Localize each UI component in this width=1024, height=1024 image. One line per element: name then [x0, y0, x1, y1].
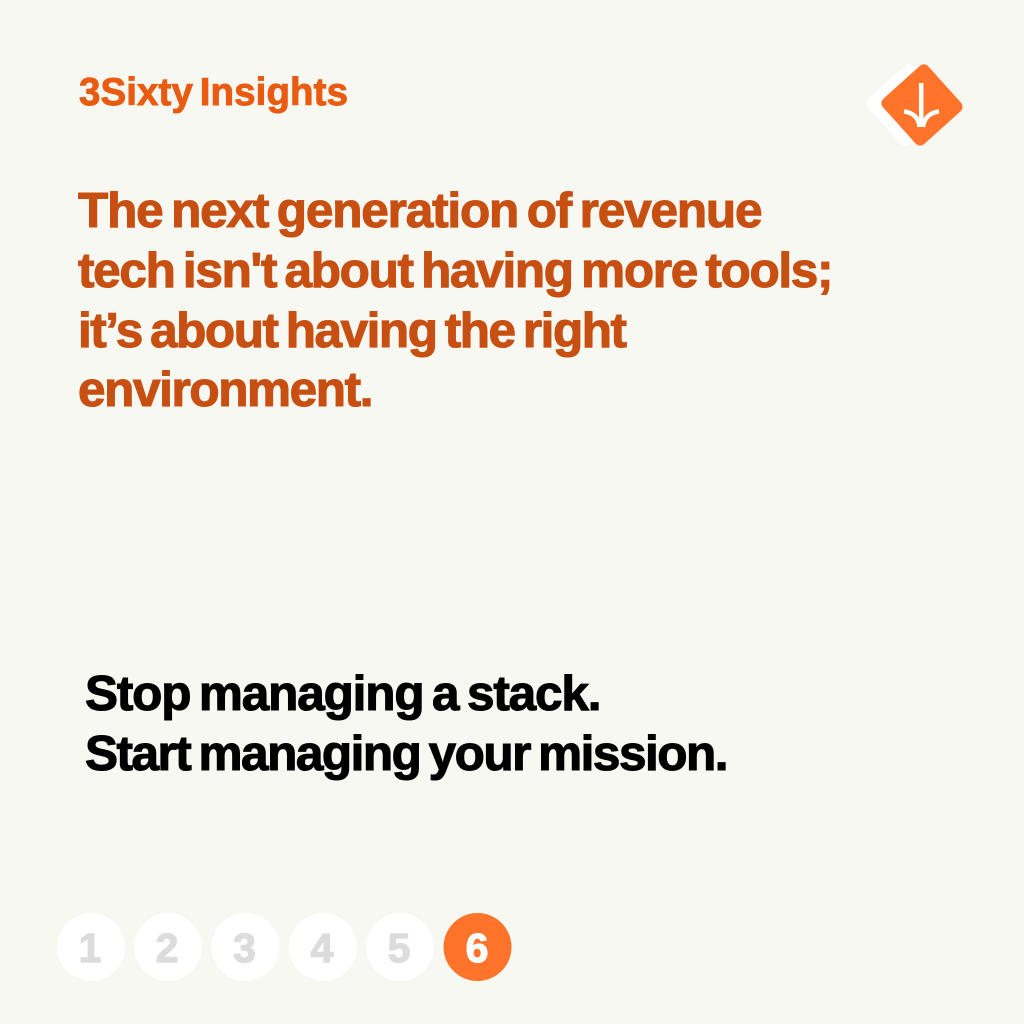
- headline: tech isn't about having more tools;: [78, 243, 834, 298]
- brand name: 3Sixty Insights: [79, 71, 348, 114]
- page indicator: 4: [311, 925, 334, 971]
- page indicator: 6: [466, 925, 488, 971]
- headline: it’s about having the right: [78, 303, 627, 358]
- closing statement: [85, 666, 728, 781]
- closing statement: Stop managing a stack.: [85, 666, 602, 721]
- closing statement: Start managing your mission.: [85, 726, 728, 781]
- icon: logo diamond with down arrow: [864, 62, 965, 148]
- page indicator: 1: [79, 925, 101, 971]
- headline: environment.: [78, 362, 374, 417]
- page indicator: [57, 913, 512, 981]
- page indicator: 2: [156, 925, 178, 971]
- page indicator: 3: [233, 925, 256, 971]
- page indicator: 5: [388, 925, 410, 971]
- headline: [78, 183, 834, 417]
- headline: The next generation of revenue: [78, 183, 762, 238]
